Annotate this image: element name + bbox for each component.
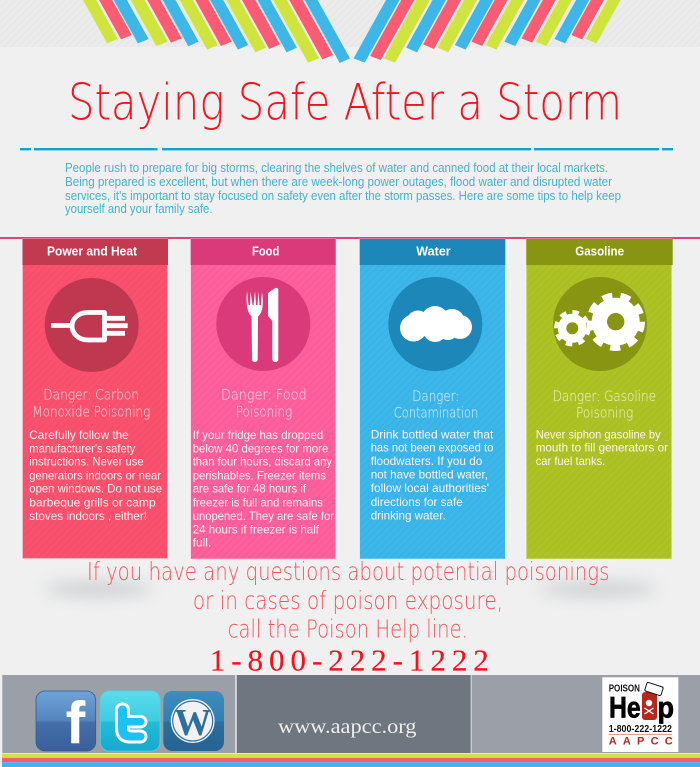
body text: mouth to fill generators or	[536, 441, 668, 455]
panel: power and heat	[22, 239, 168, 558]
body text: If your fridge has dropped	[193, 428, 323, 442]
danger label: Poisoning	[576, 406, 633, 422]
body text: perishables. Freezer items	[193, 468, 326, 482]
body text: Drink bottled water that	[371, 427, 494, 441]
danger label	[221, 388, 307, 420]
panel: water	[360, 239, 505, 559]
intro text: yourself and your family safe.	[65, 201, 212, 216]
icon: cloud	[388, 277, 482, 371]
body text: 24 hours if freezer is half	[193, 522, 320, 536]
body text: drinking water.	[371, 508, 446, 522]
intro text: Being prepared is excellent, but when there are week-long power outages, flood water and disrupted water	[65, 174, 613, 189]
icon: plug	[45, 278, 139, 372]
logo: poison help: 1-800-222-1222	[609, 724, 672, 735]
phone number: 1-800-222-1222	[210, 643, 489, 678]
logo: poison help: He	[609, 692, 641, 725]
body text	[29, 428, 162, 523]
footer bar	[2, 675, 700, 756]
heading: water: Water	[416, 244, 451, 258]
call to action text	[87, 557, 609, 644]
danger label: Danger: Carbon	[43, 388, 139, 404]
logo: poison help: POISON	[609, 684, 640, 695]
icon: facebook: f	[66, 690, 86, 756]
body text	[371, 427, 494, 522]
intro text: People rush to prepare for big storms, clearing the shelves of water and canned food at their local markets.	[65, 160, 608, 175]
panel: gasoline	[526, 239, 673, 559]
panel: food	[191, 239, 336, 559]
logo: poison help: p	[658, 692, 674, 725]
body text: full.	[193, 536, 211, 550]
call to action text: or in cases of poison exposure,	[193, 586, 503, 615]
icon: facebook	[36, 690, 96, 756]
website url: www.aapcc.org	[278, 716, 416, 738]
body text: Never siphon gasoline by	[536, 427, 661, 441]
body text: open windows. Do not use	[29, 482, 162, 496]
danger label: Danger: Food	[221, 388, 307, 404]
logo: poison help	[602, 677, 678, 752]
body text: manufacturer's safety	[29, 441, 135, 455]
body text: freezer is full and remains	[193, 496, 323, 510]
danger label: Danger:	[412, 389, 459, 405]
danger label: Monoxide Poisoning	[32, 404, 150, 420]
icon: wordpress	[163, 691, 224, 751]
icon: gears	[553, 277, 647, 371]
body text: barbeque grills or camp	[29, 496, 156, 510]
body text: than four hours, discard any	[193, 455, 332, 469]
body text: are safe for 48 hours if	[193, 482, 307, 496]
body text: below 40 degrees for more	[193, 441, 329, 455]
danger label: Contamination	[394, 406, 478, 422]
body text: not have bottled water,	[371, 468, 488, 482]
body text	[193, 428, 334, 550]
danger label	[553, 389, 656, 422]
body text: stoves indoors , either!	[29, 509, 147, 523]
bottom stripes	[2, 754, 700, 767]
heading: power and heat: Power and Heat	[47, 244, 138, 258]
body text: instructions. Never use	[29, 455, 144, 469]
intro text	[65, 160, 621, 216]
icon: wordpress: W	[174, 702, 211, 744]
body text: Carefully follow the	[29, 428, 129, 442]
body text: generators indoors or near	[29, 468, 161, 482]
danger label	[32, 388, 150, 420]
body text	[536, 427, 668, 468]
body text: floodwaters. If you do	[371, 454, 483, 468]
icon: twitter	[100, 691, 160, 751]
body text: directions for safe	[371, 495, 463, 509]
body text: unopened. They are safe for	[193, 509, 334, 523]
body text: car fuel tanks.	[536, 454, 605, 468]
intro text: services, it's important to stay focused on safety even after the storm passes. Here are some tips to help keep	[65, 188, 621, 203]
call to action text: call the Poison Help line.	[228, 615, 468, 644]
danger label: Danger: Gasoline	[553, 389, 656, 405]
danger label	[394, 389, 478, 422]
logo: poison help: AAPCC	[609, 736, 673, 748]
icon: fork and knife	[216, 277, 310, 371]
heading: food: Food	[252, 244, 279, 258]
body text: follow local authorities'	[371, 481, 489, 495]
heading: gasoline: Gasoline	[575, 244, 624, 258]
danger label: Poisoning	[236, 404, 292, 420]
top chevron stripes	[83, 0, 621, 63]
body text: has not been exposed to	[371, 441, 494, 455]
